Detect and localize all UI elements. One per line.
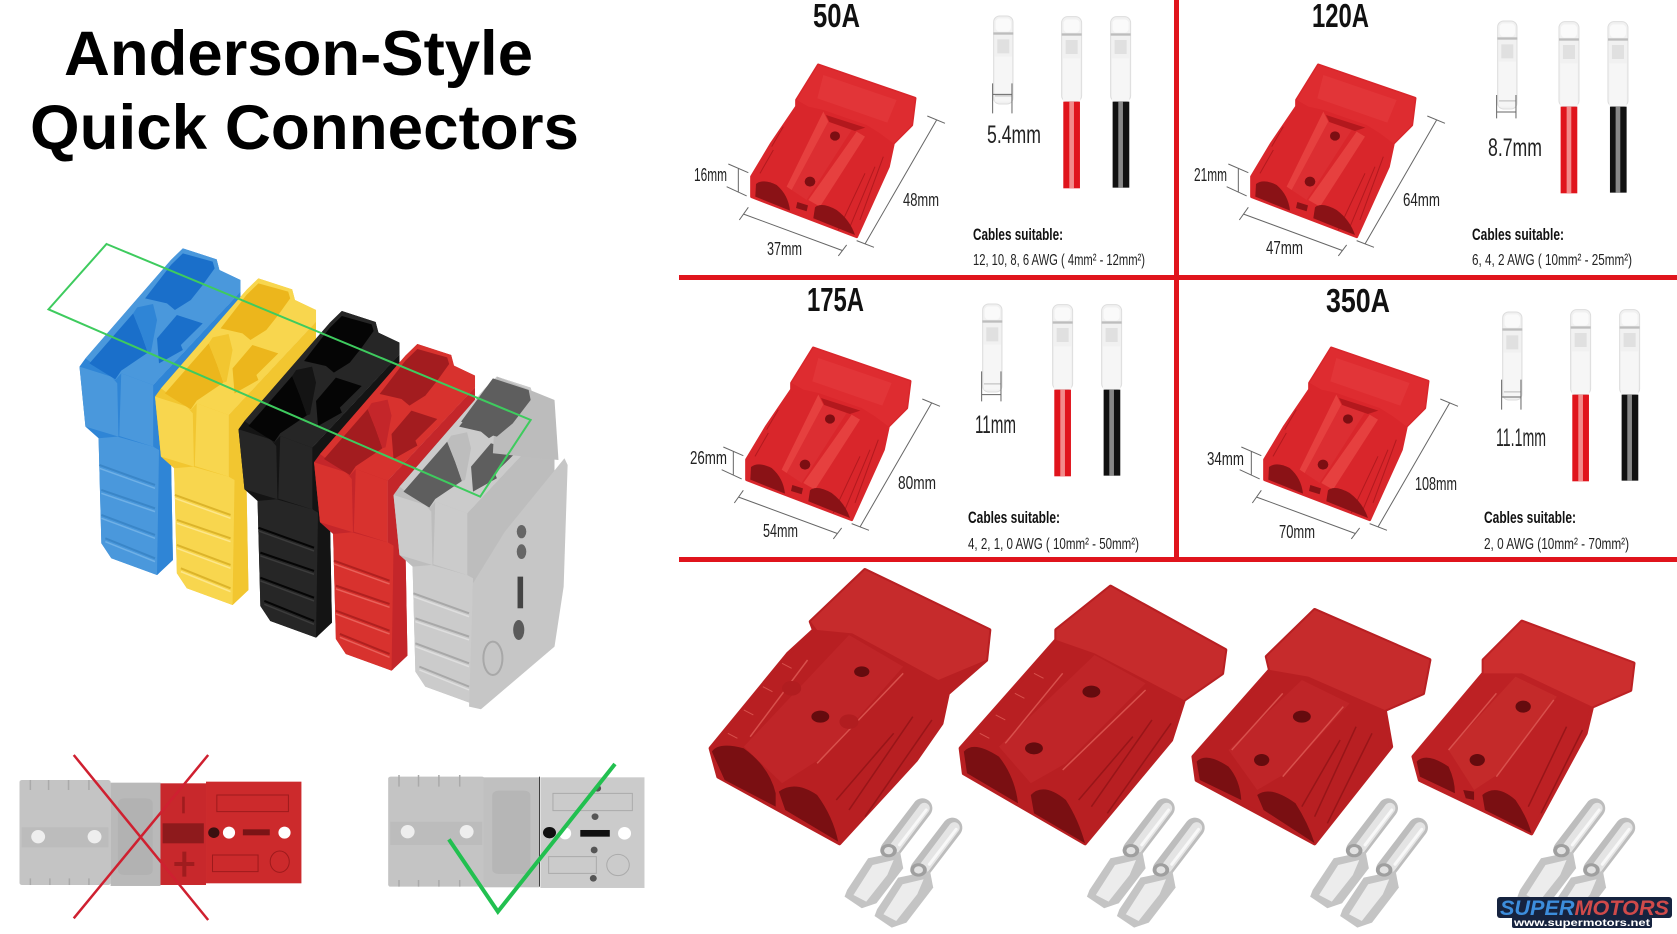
connector 1 [711, 570, 989, 843]
connector 3 [1193, 610, 1429, 843]
dimension labels: 80mm [898, 473, 936, 493]
dimension labels: 26mm [690, 448, 727, 468]
dimension labels: 48mm [903, 190, 939, 210]
dimension labels: 16mm [694, 165, 727, 185]
connector: yellow [155, 278, 316, 605]
dimension labels: Cables suitable: [973, 225, 1063, 244]
terminal pins pair 1 [845, 808, 956, 928]
dividers [679, 0, 1677, 562]
connector 4 [1413, 622, 1634, 833]
panel: wrong mating example [20, 755, 301, 920]
terminal pins pair 4 [1517, 808, 1629, 928]
icon: red X [74, 755, 208, 920]
watermark: www.supermotors.net [1513, 918, 1651, 929]
connector with dimensions [1227, 65, 1445, 256]
connector with dimensions [1240, 348, 1458, 539]
dimension labels: 4, 2, 1, 0 AWG ( 10mm² - 50mm²) [968, 536, 1139, 553]
title [30, 19, 579, 163]
panel: correct mating example [388, 764, 644, 912]
dimension labels: Cables suitable: [1472, 225, 1564, 244]
dimension labels: 70mm [1279, 522, 1315, 542]
dimension labels: 11.1mm [1496, 424, 1546, 452]
connector: red [314, 344, 475, 671]
connector 2 [961, 587, 1225, 843]
connector with dimensions [722, 348, 940, 539]
terminals [1497, 21, 1628, 193]
heading: 175A: 175A [807, 281, 864, 318]
dimension labels: 47mm [1266, 238, 1303, 258]
dimension labels: 5.4mm [987, 121, 1041, 149]
terminal pins pair 3 [1310, 808, 1422, 928]
dimension labels [1194, 134, 1632, 269]
dimension labels: 8.7mm [1488, 134, 1542, 162]
dimension labels: Cables suitable: [1484, 508, 1576, 527]
watermark: SUPERMOTORS [1500, 897, 1669, 920]
dimension labels: 37mm [767, 239, 802, 259]
title: Anderson-Style [64, 19, 533, 89]
dimension labels: 2, 0 AWG (10mm² - 70mm²) [1484, 536, 1629, 553]
panel: 175A [690, 281, 1139, 553]
green outline rectangle [48, 244, 531, 497]
panel: 50A [694, 0, 1145, 269]
dimension labels: 11mm [975, 411, 1016, 439]
terminals [1502, 310, 1640, 481]
dimension labels: 108mm [1415, 474, 1457, 494]
connector: gray [394, 377, 568, 709]
dimension labels: 64mm [1403, 190, 1440, 210]
connector: black [238, 311, 399, 638]
dimension labels: 34mm [1207, 449, 1244, 469]
panel: 120A [1194, 0, 1632, 269]
connector: blue [80, 248, 240, 575]
dimension labels: 54mm [763, 521, 798, 541]
dimension labels: 12, 10, 8, 6 AWG ( 4mm² - 12mm²) [973, 252, 1145, 269]
connector with dimensions [727, 65, 945, 256]
dimension labels [694, 121, 1145, 269]
terminals [982, 304, 1122, 476]
dimension labels: Cables suitable: [968, 508, 1060, 527]
panel: five colour connectors [48, 244, 568, 709]
terminal pins pair 2 [1087, 808, 1199, 928]
icon: green check mark [449, 764, 615, 912]
dimension labels: 21mm [1194, 165, 1227, 185]
dimension labels [690, 411, 1139, 553]
heading: 350A: 350A [1326, 282, 1390, 319]
panel: four red connectors with pins [711, 570, 1634, 928]
title: Quick Connectors [30, 93, 579, 163]
dimension labels [1207, 424, 1629, 553]
terminals [993, 16, 1131, 188]
panel: 350A [1207, 282, 1640, 553]
watermark [1497, 897, 1672, 929]
